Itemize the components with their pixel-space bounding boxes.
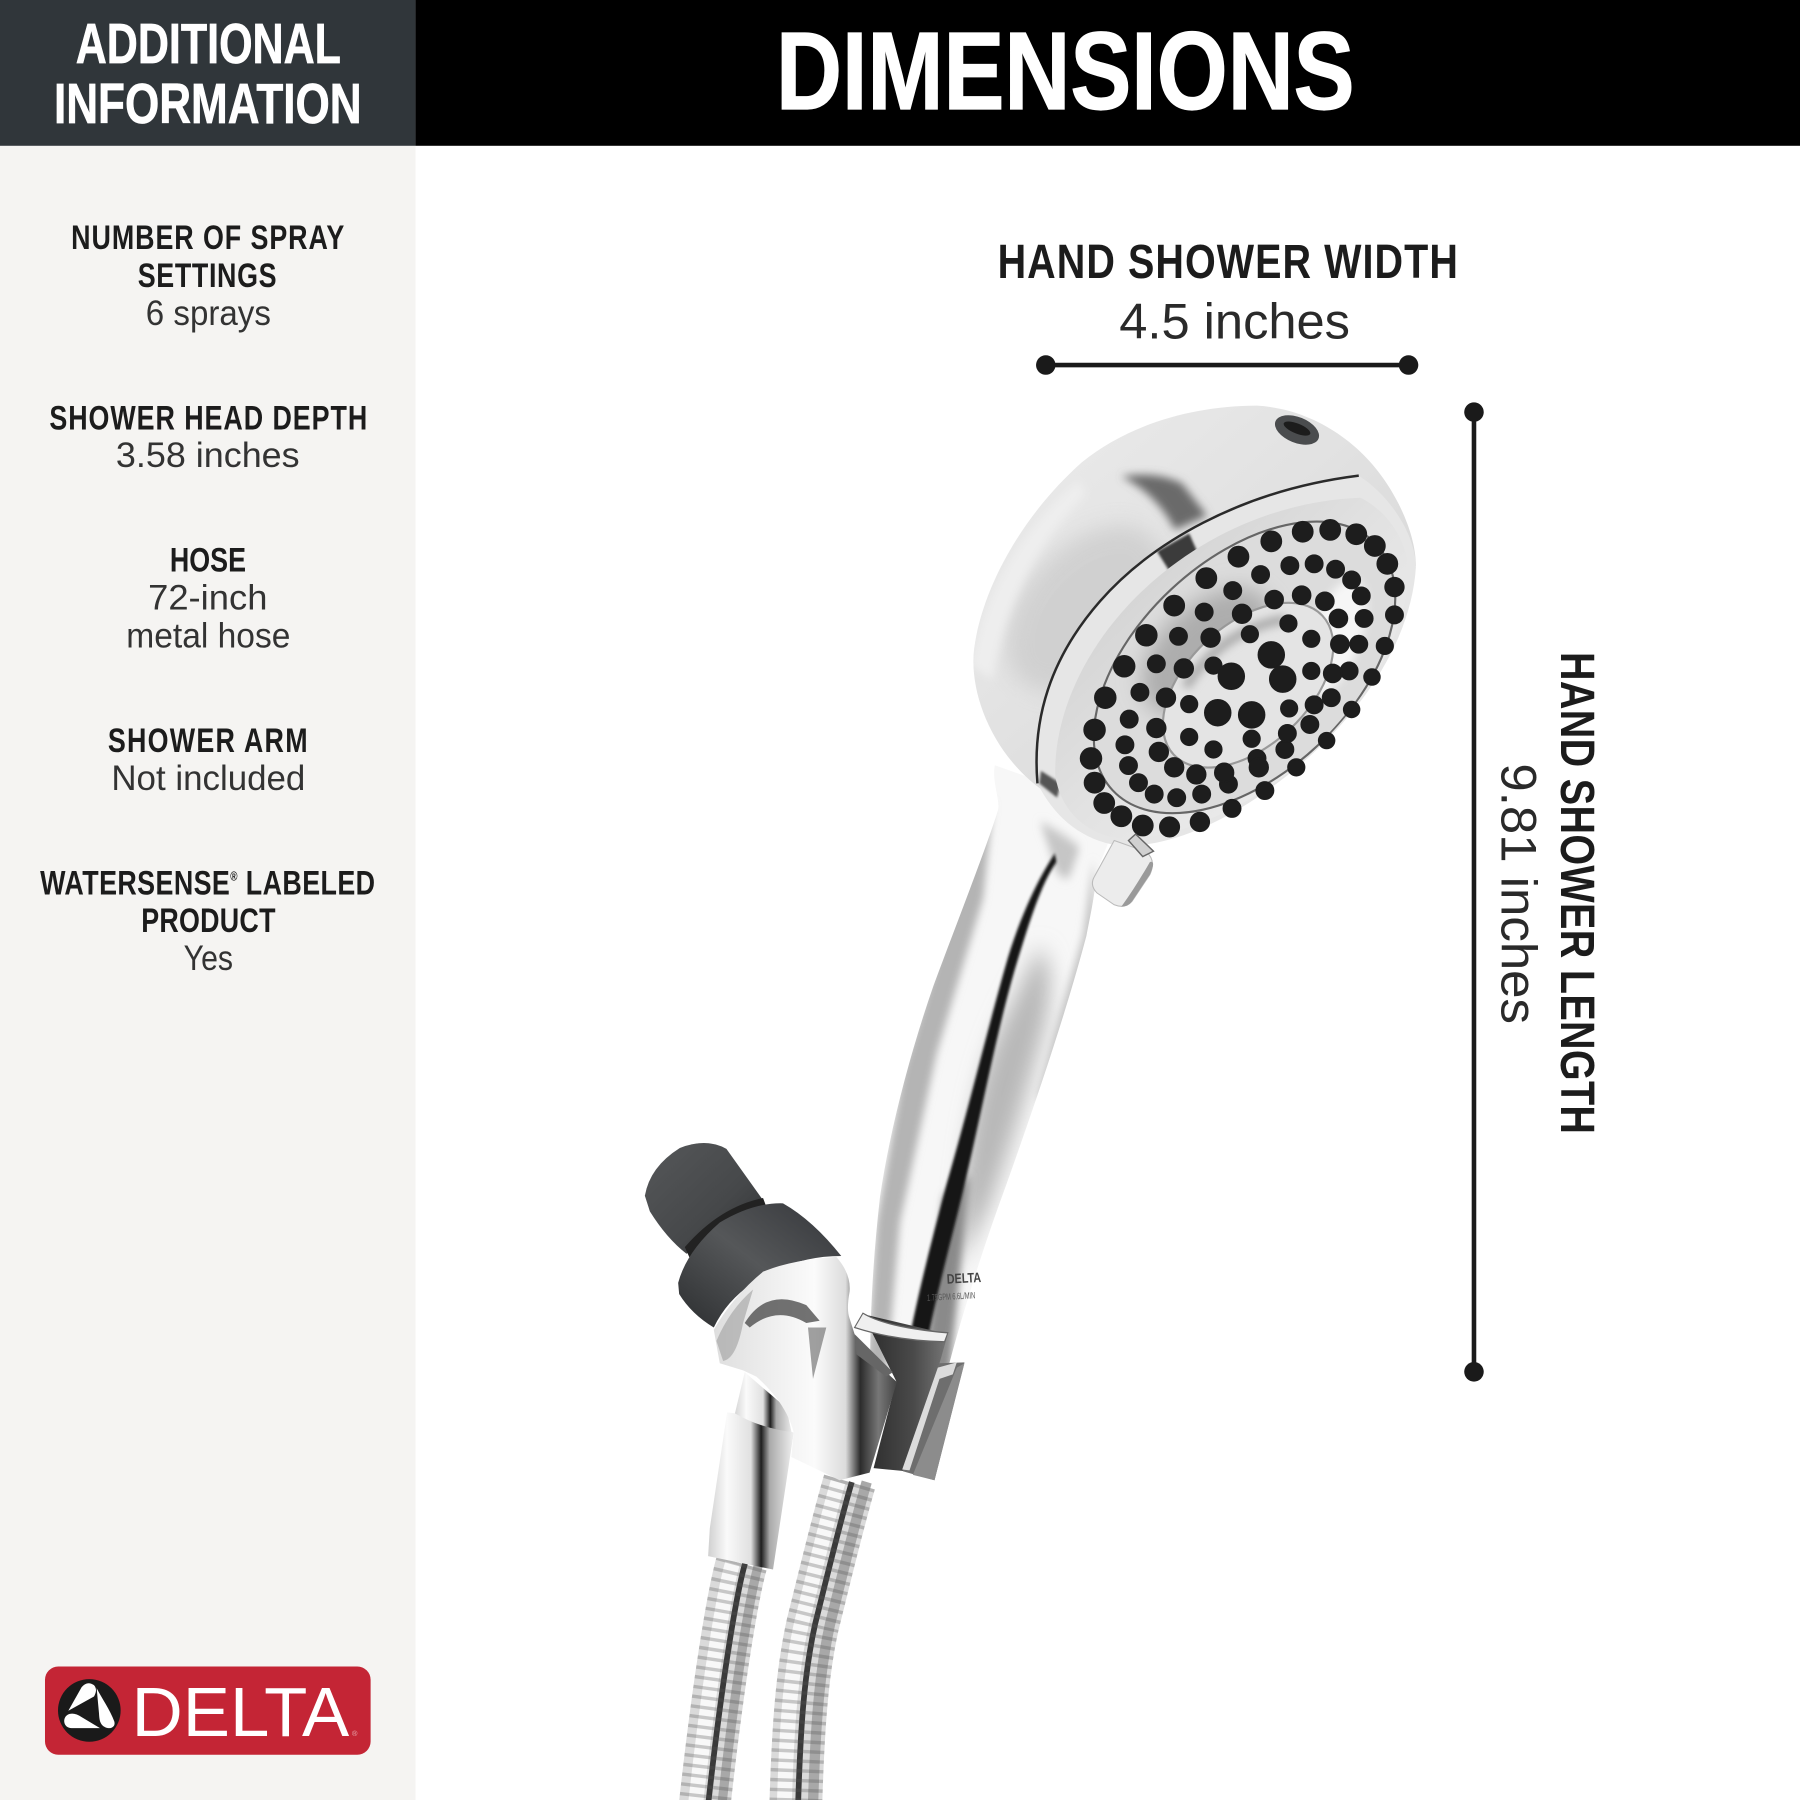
handle engraved text bbox=[926, 1270, 982, 1303]
spec: number of spray settings: NUMBER OF SPRAY bbox=[71, 218, 345, 257]
spec: watersense labeled product: PRODUCT bbox=[141, 901, 276, 940]
left hose bbox=[695, 1564, 759, 1800]
spec: watersense labeled product: Yes bbox=[184, 938, 233, 978]
header: dimensions title bbox=[416, 0, 1800, 146]
hand shower length label: 9.81 inches bbox=[1491, 763, 1548, 1024]
hand shower length label bbox=[1491, 652, 1604, 1134]
hand shower width label: 4.5 inches bbox=[1119, 293, 1350, 350]
spec: shower arm: SHOWER ARM bbox=[108, 721, 308, 760]
black adjuster knob bbox=[645, 1143, 841, 1327]
handle engraved text: 1.75GPM 6.6L/MIN bbox=[927, 1290, 975, 1303]
delta logo: DELTA bbox=[132, 1673, 350, 1751]
spec: number of spray settings bbox=[71, 218, 345, 333]
spec: watersense labeled product: ® bbox=[230, 870, 238, 884]
spray selector lever bbox=[1092, 834, 1153, 907]
width dimension line bbox=[1036, 355, 1418, 375]
left sidebar panel bbox=[0, 146, 416, 1800]
spec: watersense labeled product: LABELED bbox=[238, 863, 375, 902]
head button bbox=[1271, 409, 1323, 451]
spec: shower arm: Not included bbox=[111, 758, 305, 798]
handle bbox=[870, 794, 1102, 1370]
spec: hose: HOSE bbox=[170, 540, 246, 579]
bracket arm and sleeve bbox=[708, 1372, 794, 1570]
length dimension line bbox=[1464, 402, 1484, 1382]
delta logo bbox=[45, 1666, 371, 1755]
right hose bbox=[784, 1482, 867, 1800]
product photo: hand shower with bracket bbox=[645, 406, 1449, 1800]
spray face ring grooves bbox=[1092, 520, 1396, 814]
header: additional information: INFORMATION bbox=[54, 72, 362, 135]
spec: shower head depth bbox=[49, 398, 367, 475]
spray nozzles bbox=[1081, 520, 1404, 837]
head spray face bbox=[1055, 498, 1409, 839]
hand shower length label: HAND SHOWER LENGTH bbox=[1550, 652, 1604, 1134]
hand shower width label: HAND SHOWER WIDTH bbox=[998, 235, 1458, 289]
head bezel ring bbox=[1037, 476, 1416, 846]
header: dimensions title: DIMENSIONS bbox=[776, 10, 1355, 133]
spec: shower head depth: 3.58 inches bbox=[116, 435, 300, 475]
spec: watersense labeled product: WATERSENSE bbox=[40, 863, 230, 902]
handle lower section, cradle and bracket bbox=[714, 1257, 964, 1480]
shower head bbox=[971, 406, 1449, 907]
spec: watersense labeled product bbox=[40, 863, 375, 978]
spec: hose: metal hose bbox=[126, 615, 290, 655]
head back shell bbox=[973, 406, 1416, 791]
spec: number of spray settings: SETTINGS bbox=[138, 256, 277, 295]
spec: hose bbox=[126, 540, 290, 655]
header: additional information bbox=[0, 0, 416, 146]
handle engraved text: DELTA bbox=[946, 1270, 982, 1287]
header: additional information: ADDITIONAL bbox=[76, 12, 341, 75]
spec: shower arm bbox=[108, 721, 308, 798]
spec: hose: 72-inch bbox=[148, 578, 267, 618]
hand shower width label bbox=[998, 235, 1458, 350]
spec: shower head depth: SHOWER HEAD DEPTH bbox=[49, 398, 367, 437]
spec: number of spray settings: 6 sprays bbox=[146, 293, 271, 333]
delta logo: ® bbox=[352, 1729, 358, 1738]
